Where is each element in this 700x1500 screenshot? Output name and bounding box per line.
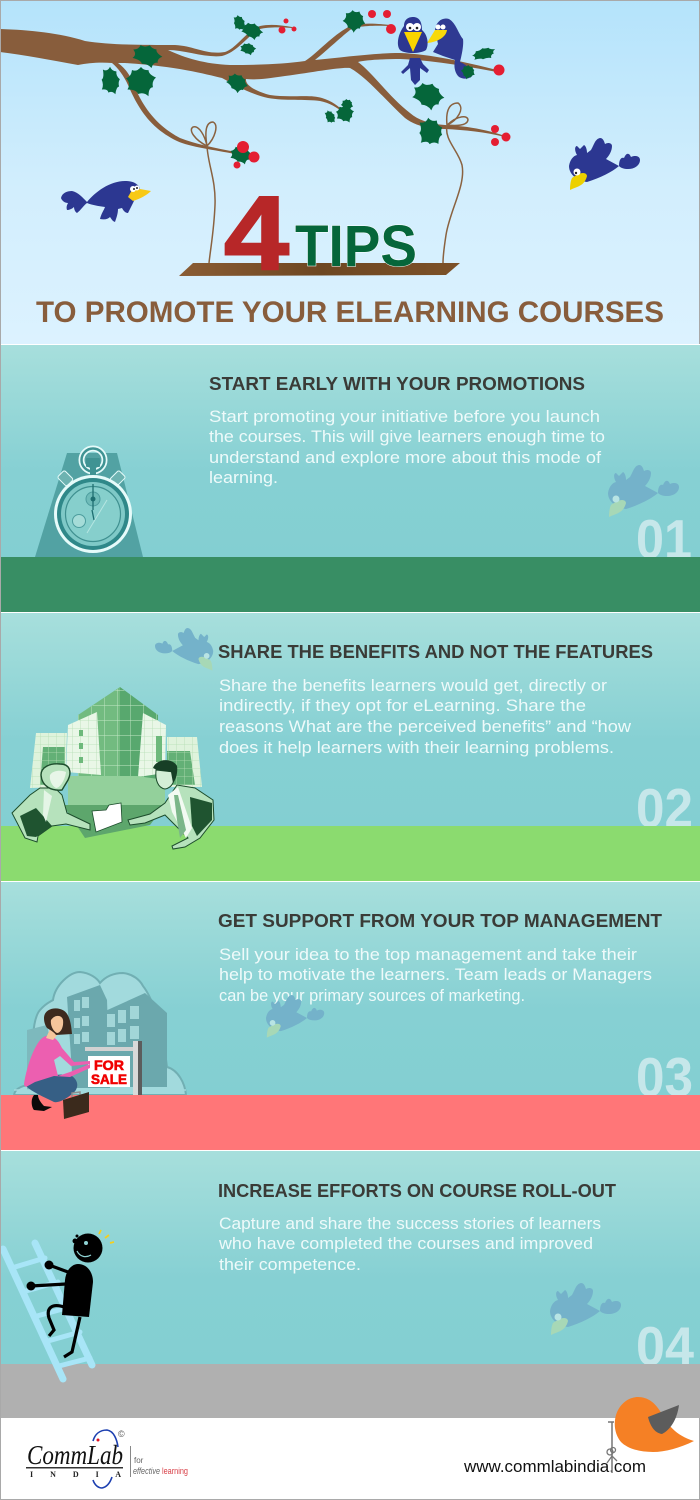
tip 1 body text: learning.: [209, 468, 278, 487]
tip 1 number: 01: [636, 508, 692, 570]
illustration: for sale sign: SALE: [91, 1071, 127, 1087]
website url: www.commlabindia.com: [463, 1457, 646, 1476]
panel: tip 3: [0, 882, 700, 1150]
icon: orange bird with rope: [607, 1397, 694, 1473]
tip 1 body text: Start promoting your initiative before you launch: [209, 407, 600, 426]
panel: hero header: [0, 0, 700, 344]
flying bird: right: [569, 138, 640, 190]
faded bird: [550, 1283, 621, 1335]
tip 2 heading: SHARE THE BENEFITS AND NOT THE FEATURES: [218, 642, 653, 662]
title: 4 TIPS: [224, 175, 417, 292]
logo: CommLab India: effective: [133, 1466, 160, 1476]
panel: tip 1: [0, 345, 700, 612]
tip 3 number: 03: [636, 1046, 693, 1108]
faded bird: [608, 465, 679, 517]
title: 4 TIPS: TIPS: [295, 214, 417, 279]
tip 1 body text: [209, 407, 605, 487]
title: 4 TIPS: 4: [224, 175, 289, 292]
tip 3 body text: [219, 945, 652, 1005]
tip 4 number: 04: [636, 1315, 694, 1377]
logo: CommLab India: CommLab: [27, 1440, 123, 1470]
panel: tip 2: [0, 613, 700, 881]
illustration: cloud and office buildings: [14, 972, 186, 1095]
tip 4 body text: [218, 1214, 601, 1274]
illustration: man with folder: [128, 760, 214, 849]
tip 2 body text: indirectly, if they opt for eLearning. Share the: [219, 696, 586, 715]
tip 4 band: [0, 1364, 700, 1418]
tip 3 band: [0, 1095, 700, 1150]
illustration: office building: [30, 687, 202, 838]
logo: CommLab India: learning: [162, 1466, 188, 1476]
illustration: climbing man: [26, 1230, 114, 1357]
illustration: woman with folder: [12, 764, 90, 842]
tip 1 body text: understand and explore more about this mode of: [209, 448, 601, 467]
holly leaves: [98, 6, 497, 165]
tip 2 body text: Share the benefits learners would get, directly or: [219, 676, 607, 695]
logo: CommLab India: for: [134, 1456, 144, 1465]
branches: [0, 24, 505, 154]
illustration: folder: [92, 803, 122, 832]
tip 3 heading: GET SUPPORT FROM YOUR TOP MANAGEMENT: [218, 911, 662, 931]
tip 3 body text: Sell your idea to the top management and take their: [219, 945, 637, 964]
tip 4 body text: their competence.: [219, 1255, 361, 1274]
tip 4 body text: who have completed the courses and improved: [218, 1234, 593, 1253]
tip 2 number: 02: [636, 777, 693, 839]
tip 1 band: [0, 557, 700, 612]
logo: CommLab India: [26, 1429, 188, 1488]
footer: [0, 1418, 700, 1500]
tip 3 body text: can be your primary sources of marketing.: [219, 986, 525, 1005]
flying bird: left: [61, 181, 151, 222]
tip 2 body text: [219, 676, 632, 757]
tip 4 heading: INCREASE EFFORTS ON COURSE ROLL-OUT: [218, 1181, 616, 1201]
tip 4 body text: Capture and share the success stories of learners: [219, 1214, 601, 1233]
faded bird: [266, 995, 324, 1038]
illustration: for sale sign: FOR: [94, 1057, 124, 1073]
illustration: briefcase: [63, 1092, 89, 1119]
icon: stopwatch: [35, 448, 143, 557]
perched bird: back: [427, 18, 478, 82]
logo: CommLab India: I N D I A: [30, 1470, 121, 1479]
tip 1 heading: START EARLY WITH YOUR PROMOTIONS: [209, 374, 585, 394]
faded bird: [155, 628, 213, 671]
swing plank: [179, 263, 460, 276]
logo: CommLab India: ©: [118, 1429, 125, 1439]
tip 2 body text: reasons What are the perceived benefits” and “how: [219, 717, 632, 736]
illustration: woman kneeling: [24, 1008, 90, 1111]
tip 1 body text: the courses. This will give learners enough time to: [209, 427, 605, 446]
red berries: [234, 10, 510, 168]
subtitle: TO PROMOTE YOUR ELEARNING COURSES: [36, 296, 664, 329]
swing ropes: [191, 103, 468, 263]
illustration: ladder: [3, 1243, 92, 1379]
tip 3 body text: help to motivate the learners. Team leads or Managers: [219, 965, 652, 984]
tip 2 body text: does it help learners with their learning problems.: [219, 738, 614, 757]
illustration: for sale sign: [85, 1041, 142, 1095]
panel: tip 4: [0, 1151, 700, 1418]
perched bird: front: [398, 17, 429, 85]
tip 2 band: [0, 826, 700, 881]
